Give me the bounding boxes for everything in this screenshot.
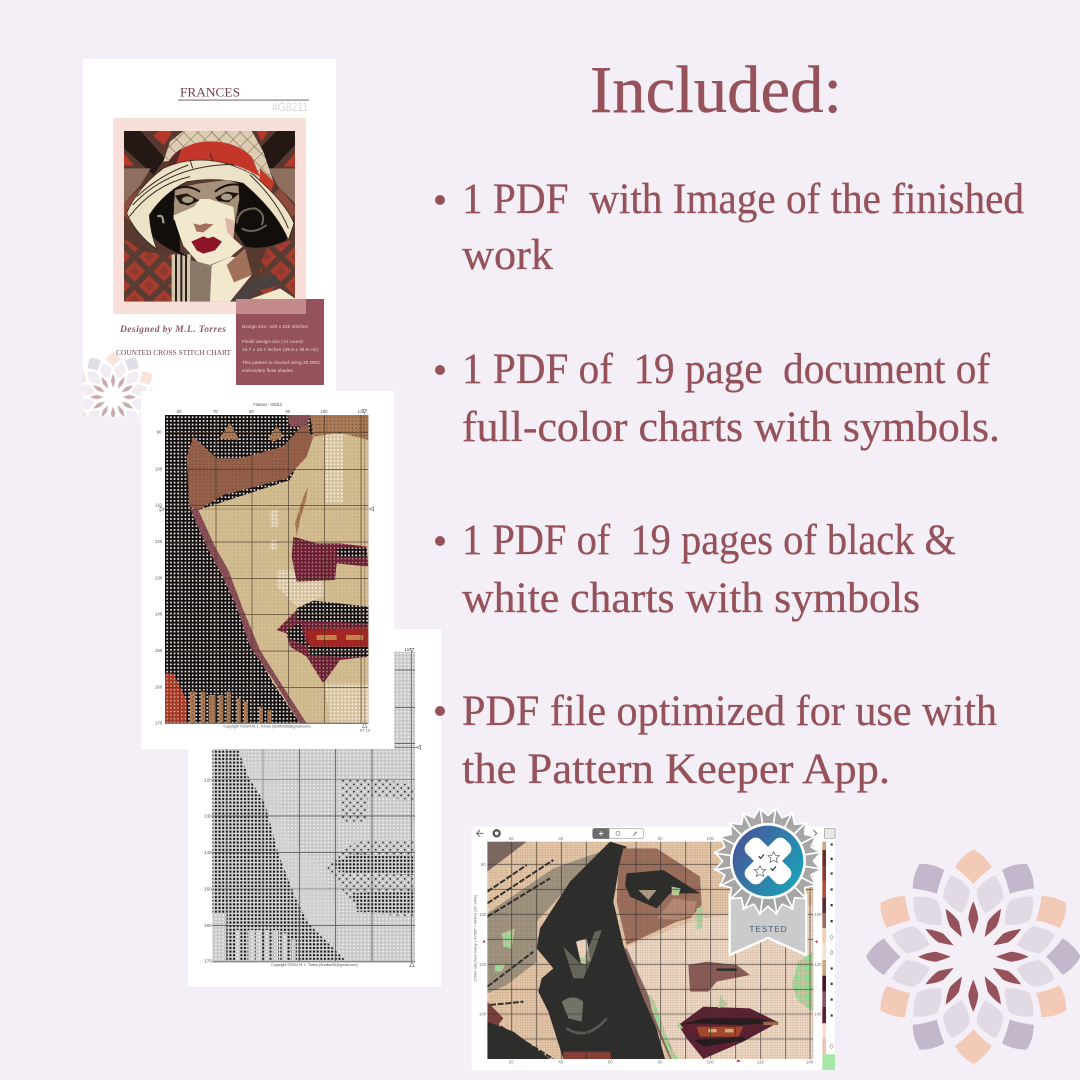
info box: Design size: 220 x 220 stitches xyxy=(242,324,309,329)
bullet item: black and white charts pdf: white charts with symbols xyxy=(462,575,920,622)
app chart axis labels: 40 xyxy=(558,1060,564,1065)
full-colour chart: 110 xyxy=(358,409,365,414)
bullet item: black and white charts pdf: 1 PDF of 19 pages of black & xyxy=(462,517,956,564)
greyscale chart xyxy=(204,647,421,967)
app chart axis labels: 140 xyxy=(479,1012,487,1017)
app chart axis labels: 100 xyxy=(479,912,487,917)
ribbon xyxy=(730,894,806,955)
sheet xyxy=(188,629,441,987)
pink image mat xyxy=(113,118,306,314)
full-colour chart: 80 xyxy=(249,409,254,414)
info box xyxy=(236,299,324,385)
panel: pattern cover page xyxy=(83,59,336,417)
info box: Finish design size (14 count): xyxy=(242,339,304,344)
title rule xyxy=(178,100,309,101)
app chart axis labels: 20 xyxy=(509,1060,514,1065)
app chart axis labels: 27087 stitched today | 47087 / 48400 (97.96%) xyxy=(473,894,478,982)
bullet item: image pdf xyxy=(435,176,1024,279)
bullet item: image pdf: work xyxy=(462,232,554,279)
icon: large flower logo xyxy=(866,849,1080,1064)
bullet item: black and white charts pdf xyxy=(435,517,956,622)
panel: full-colour chart page xyxy=(141,391,394,749)
cover sheet xyxy=(83,59,336,417)
app chart axis labels: 100 xyxy=(707,836,714,841)
full-colour chart: 90 xyxy=(157,430,162,435)
app chart axis labels: 140 xyxy=(814,1012,822,1017)
app chart axis labels: 80 xyxy=(481,862,486,867)
full-colour chart: 170 xyxy=(155,720,163,725)
pattern code: #G8211 xyxy=(272,100,308,114)
scalloped seal xyxy=(714,807,822,915)
panel: black and white chart page xyxy=(188,629,441,987)
greyscale chart: 110 xyxy=(404,647,412,652)
full-colour chart: 100 xyxy=(320,409,328,414)
icon: faded flower logo xyxy=(83,352,153,417)
app chart axis labels: 40 xyxy=(558,836,564,841)
portrait artwork xyxy=(124,131,295,302)
full-colour chart: 150 xyxy=(155,648,163,653)
full-colour chart: 100 xyxy=(155,466,163,471)
full-colour chart: 140 xyxy=(155,612,163,617)
app chart axis labels: 120 xyxy=(814,962,822,967)
bullet item: pattern keeper xyxy=(435,688,997,793)
bullet item: pattern keeper: PDF file optimized for use with xyxy=(462,688,997,735)
designer credit: Designed by M.L. Torres xyxy=(119,325,226,335)
chart type label: COUNTED CROSS STITCH CHART xyxy=(116,348,231,357)
greyscale chart: 120 xyxy=(204,777,212,782)
position markers xyxy=(483,940,817,1062)
app chart axis labels: 140 xyxy=(806,1060,814,1065)
app chart axis labels xyxy=(473,836,822,1065)
ribbon: TESTED xyxy=(749,924,787,934)
full-colour chart: Frances - G8313 xyxy=(253,402,283,407)
info box: This pattern is charted using 20 DMC xyxy=(242,360,320,365)
seal disc xyxy=(730,823,806,899)
bullet item: pattern keeper: the Pattern Keeper App. xyxy=(462,746,890,793)
full-colour chart: 120 xyxy=(155,539,163,544)
app chart axis labels: 120 xyxy=(479,962,487,967)
greyscale chart: Copyright ©2024 M. L. Torres (Sunfish56@gmail.com) xyxy=(271,963,358,967)
full-colour chart: Copyright ©2024 M. L. Torres (Sunfish56@gmail.com) xyxy=(223,725,311,729)
greyscale chart: 150 xyxy=(204,887,212,892)
full-colour chart xyxy=(155,402,374,733)
heading: Included: xyxy=(590,53,842,127)
greyscale chart: 170 xyxy=(204,959,212,964)
app chart axis labels: 100 xyxy=(814,912,822,917)
app toolbar xyxy=(477,828,835,839)
white cross xyxy=(742,835,794,887)
colour key column xyxy=(822,842,835,1070)
bullet list xyxy=(435,176,1024,793)
full-colour chart: 60 xyxy=(177,409,182,414)
bullet item: colour charts pdf: full-color charts with symbols. xyxy=(462,404,1000,451)
app chart axis labels: 60 xyxy=(608,1060,613,1065)
pattern title FRANCES: FRANCES xyxy=(180,84,240,100)
app chart axis labels: 100 xyxy=(707,1060,714,1065)
full-colour chart: 67 13 xyxy=(360,728,371,733)
full-colour chart: 130 xyxy=(155,575,163,580)
bullet item: image pdf: 1 PDF with Image of the finished xyxy=(462,176,1024,223)
icon: Pattern Keeper tested badge xyxy=(714,807,822,955)
bullet item: colour charts pdf: 1 PDF of 19 page document of xyxy=(462,346,991,393)
app background xyxy=(472,827,835,1070)
full-colour chart: 160 xyxy=(155,684,163,689)
panel: Pattern Keeper app screenshot xyxy=(472,827,835,1070)
greyscale chart: 130 xyxy=(204,814,212,819)
seal gradient xyxy=(733,826,803,896)
greyscale chart: 160 xyxy=(204,923,212,928)
sheet xyxy=(141,391,394,749)
greyscale chart: 140 xyxy=(204,850,212,855)
app chart axis labels: 80 xyxy=(658,1060,663,1065)
app chart axis labels: 20 xyxy=(509,836,514,841)
app chart axis labels: 120 xyxy=(757,1060,764,1065)
info box: embroidery floss shades. xyxy=(242,368,294,373)
full-colour chart: 110 xyxy=(155,503,162,508)
app chart axis labels: 80 xyxy=(658,836,663,841)
bullet item: colour charts pdf xyxy=(435,346,1000,451)
full-colour chart: 70 xyxy=(213,409,218,414)
app chart xyxy=(487,842,813,1059)
info box: 15.7 x 15.7 inches (39.9 x 39.9 cm) xyxy=(242,347,319,352)
full-colour chart: 90 xyxy=(285,409,291,414)
